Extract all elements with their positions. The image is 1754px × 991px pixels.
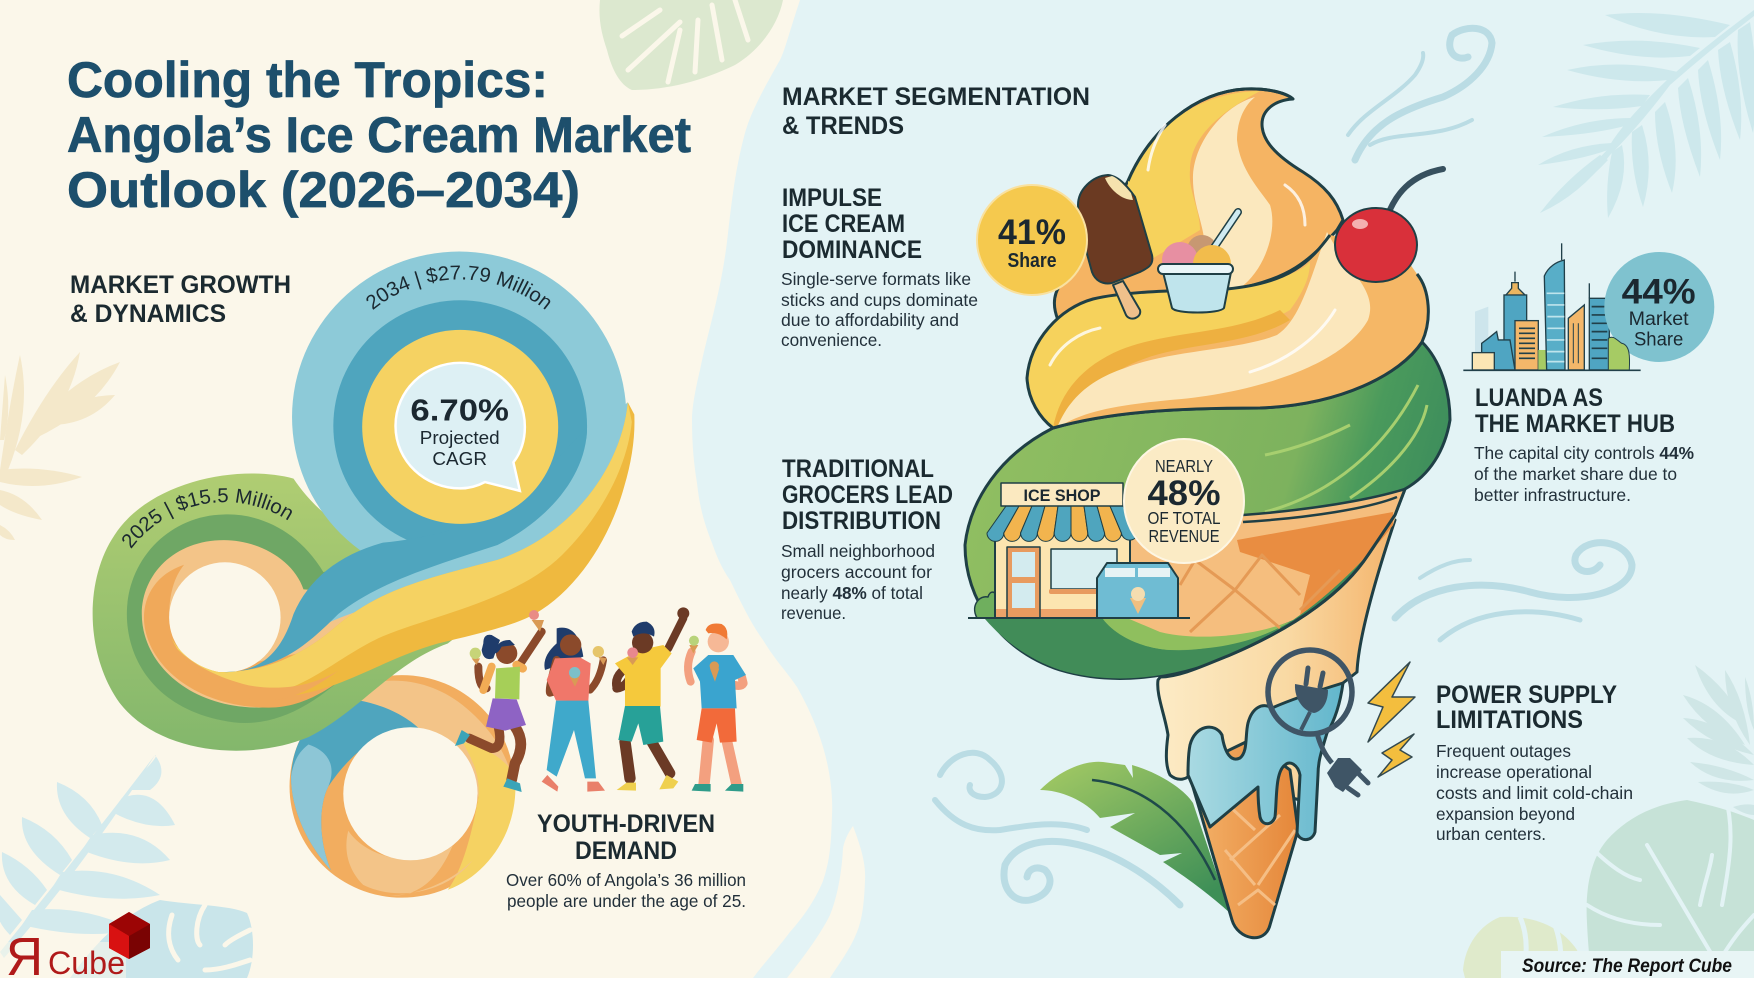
shop awning	[987, 506, 1138, 541]
text block: impulse ice cream dominance	[781, 184, 978, 350]
yellow ring	[362, 330, 558, 524]
text block: youth-driven demand: Over 60% of Angola’s 36 million	[506, 870, 746, 890]
bottom white strip	[0, 978, 1754, 991]
decorative leaf: top monstera	[599, 0, 783, 90]
building: blue slim	[1589, 283, 1609, 370]
text block: Luanda market hub: better infrastructure.	[1474, 485, 1631, 505]
shop wall	[995, 535, 1130, 618]
callout: 44% market share: 44%	[1622, 272, 1696, 311]
skyline ground	[1463, 368, 1641, 373]
heading: market segmentation and trends: & TRENDS	[782, 112, 904, 140]
tree	[1608, 337, 1630, 370]
power plug ring	[1268, 650, 1368, 795]
freezer	[1097, 563, 1178, 618]
text block: impulse ice cream dominance: Single-serve formats like	[781, 269, 971, 289]
label: 2034 value: 2034 | $27.79 Million	[366, 266, 550, 310]
shop sign	[1001, 483, 1123, 506]
person 2	[542, 628, 607, 792]
text block: power supply limitations: Frequent outages	[1436, 741, 1571, 761]
ice cream cup	[1158, 212, 1238, 312]
callout: 44% market share	[1604, 252, 1714, 362]
building: cream low	[1472, 353, 1494, 370]
green scoop	[965, 342, 1450, 678]
callout bubble: CAGR: Projected	[420, 427, 500, 448]
callout bubble: CAGR	[396, 363, 525, 491]
building: orange block	[1515, 321, 1538, 370]
logo: RCube: Я	[6, 927, 43, 987]
top swirl	[1054, 89, 1343, 320]
decorative leaf: bottom yellow-green	[1463, 917, 1585, 978]
ground line	[968, 617, 1190, 619]
callout: 41% share	[977, 185, 1087, 295]
icon: lightning bolts	[1368, 662, 1415, 777]
heading: market growth and dynamics	[70, 271, 291, 328]
cherry	[1335, 169, 1443, 282]
decorative swirls: top right	[1348, 28, 1492, 160]
illustration: giant ice cream cone	[965, 89, 1450, 938]
text block: Luanda market hub	[1474, 384, 1694, 505]
heading: market growth and dynamics: & DYNAMICS	[70, 300, 226, 328]
title: Angola’s Ice Cream Market	[67, 107, 691, 163]
title: Cooling the Tropics:	[67, 52, 548, 108]
text block: youth-driven demand	[506, 810, 746, 911]
top circle light blue ring	[292, 252, 626, 582]
top circle dark blue ring	[333, 300, 587, 551]
middle swirl	[1027, 125, 1428, 428]
callout: nearly 48% of total revenue: REVENUE	[1148, 526, 1220, 546]
callout: nearly 48% of total revenue	[1124, 439, 1244, 563]
text block: impulse ice cream dominance: convenience.	[781, 330, 882, 350]
text block: power supply limitations	[1436, 681, 1633, 844]
text block: traditional grocers: TRADITIONAL	[782, 455, 934, 483]
light blue band	[316, 402, 628, 629]
text block: youth-driven demand: people are under the age of 25.	[507, 891, 746, 911]
text block: power supply limitations: POWER SUPPLY	[1436, 681, 1617, 709]
building: blue tower	[1504, 272, 1527, 370]
text block: impulse ice cream dominance: ICE CREAM	[782, 210, 905, 238]
logo: RCube	[0, 912, 150, 987]
green loop	[93, 474, 547, 751]
text block: youth-driven demand: DEMAND	[575, 837, 677, 865]
person 4	[688, 623, 746, 792]
decorative leaf: tan palm left	[0, 352, 120, 540]
decorative swirls: lower left of cone	[935, 753, 1180, 905]
illustration: Luanda skyline	[1463, 243, 1714, 370]
scoop lower outline	[1160, 489, 1405, 677]
cone top section	[1110, 489, 1405, 637]
lower loop	[290, 675, 515, 898]
decorative leaf: bottom right palm	[1683, 665, 1754, 815]
text block: youth-driven demand: YOUTH-DRIVEN	[537, 810, 715, 838]
text block: impulse ice cream dominance: due to affordability and	[781, 310, 959, 330]
decorative leaf: top right palm	[1538, 10, 1754, 218]
building: green low	[1538, 350, 1547, 370]
text block: Luanda market hub: of the market share due to	[1474, 464, 1677, 484]
melted drip base	[1158, 520, 1395, 800]
blue band	[219, 427, 587, 672]
decorative leaf: blue palm bottom left	[0, 755, 175, 958]
building: tall curved tower	[1544, 243, 1565, 370]
text block: traditional grocers: DISTRIBUTION	[782, 507, 941, 535]
text block: power supply limitations: costs and limit cold-chain	[1436, 783, 1633, 803]
decorative leaf: bottom right green monstera	[1587, 795, 1754, 978]
building: pale back tower	[1475, 307, 1488, 353]
callout: 41% share: 41%	[998, 213, 1066, 252]
heading: market growth and dynamics: MARKET GROWTH	[70, 271, 291, 299]
text block: Luanda market hub: THE MARKET HUB	[1475, 410, 1675, 438]
cone tip	[1188, 740, 1298, 938]
label: 2025 value: 2025 | $15.5 Million	[122, 488, 292, 548]
text block: power supply limitations: urban centers.	[1436, 824, 1546, 844]
chart: ribbon growth spiral	[92, 252, 634, 898]
title	[67, 52, 691, 218]
building: low dome	[1482, 332, 1515, 370]
text block: traditional grocers: grocers account for	[781, 562, 932, 582]
source note: Source: The Report Cube	[1522, 955, 1732, 977]
text block: traditional grocers: nearly 48% of total	[781, 583, 923, 603]
callout: nearly 48% of total revenue: 48%	[1148, 474, 1220, 513]
text block: traditional grocers: GROCERS LEAD	[782, 481, 953, 509]
yellow band	[172, 402, 632, 694]
text block: Luanda market hub: The capital city controls 44%	[1474, 443, 1694, 463]
cone tip waffle lines	[1212, 790, 1295, 905]
illustration: ice shop	[968, 483, 1190, 618]
callout: 44% market share: Market	[1629, 309, 1689, 330]
text block: Luanda market hub: LUANDA AS	[1475, 384, 1603, 412]
heading: market segmentation and trends	[782, 83, 1090, 140]
bush	[975, 592, 1000, 618]
decorative swirls: right middle	[1395, 543, 1632, 640]
heading: market segmentation and trends: MARKET SEGMENTATION	[782, 83, 1090, 111]
shop window	[1049, 549, 1119, 594]
shop door	[1007, 547, 1040, 618]
text block: power supply limitations: LIMITATIONS	[1436, 706, 1583, 734]
gold band	[172, 402, 634, 697]
green scoop highlights	[1265, 385, 1427, 512]
green scoop lower shading	[985, 555, 1368, 678]
decorative leaf: blue monstera bottom left	[70, 900, 253, 978]
callout: 44% market share: Share	[1634, 329, 1683, 350]
callout: nearly 48% of total revenue: NEARLY	[1155, 456, 1213, 476]
shop sign: ICE SHOP	[1024, 487, 1100, 505]
person 1	[455, 610, 544, 792]
person 3	[615, 607, 689, 791]
text block: impulse ice cream dominance: sticks and cups dominate	[781, 290, 978, 310]
background: cream sliver	[787, 826, 865, 978]
logo: RCube: Cube	[48, 945, 125, 981]
building: orange wedge	[1568, 305, 1584, 370]
shop base	[996, 609, 1129, 618]
text block: traditional grocers: Small neighborhood	[781, 541, 935, 561]
callout bubble: CAGR: 6.70%	[410, 393, 509, 427]
illustration: youth group with ice creams	[455, 607, 746, 792]
text block: power supply limitations: increase operational	[1436, 762, 1592, 782]
background: cream panel	[0, 0, 832, 978]
callout bubble: CAGR: CAGR	[432, 448, 487, 469]
orange band lower	[177, 648, 338, 700]
text block: traditional grocers: revenue.	[781, 603, 846, 623]
title: Outlook (2026–2034)	[67, 162, 580, 218]
callout: 41% share: Share	[1008, 250, 1056, 272]
callout: nearly 48% of total revenue: OF TOTAL	[1148, 508, 1221, 528]
text block: impulse ice cream dominance: DOMINANCE	[782, 236, 922, 264]
blue melt	[1188, 683, 1343, 840]
text block: traditional grocers	[781, 455, 953, 623]
green scoop light band	[1103, 619, 1290, 650]
text block: power supply limitations: expansion beyond	[1436, 804, 1575, 824]
text block: impulse ice cream dominance: IMPULSE	[782, 184, 882, 212]
leaf	[1040, 762, 1230, 913]
popsicle	[1078, 175, 1152, 319]
